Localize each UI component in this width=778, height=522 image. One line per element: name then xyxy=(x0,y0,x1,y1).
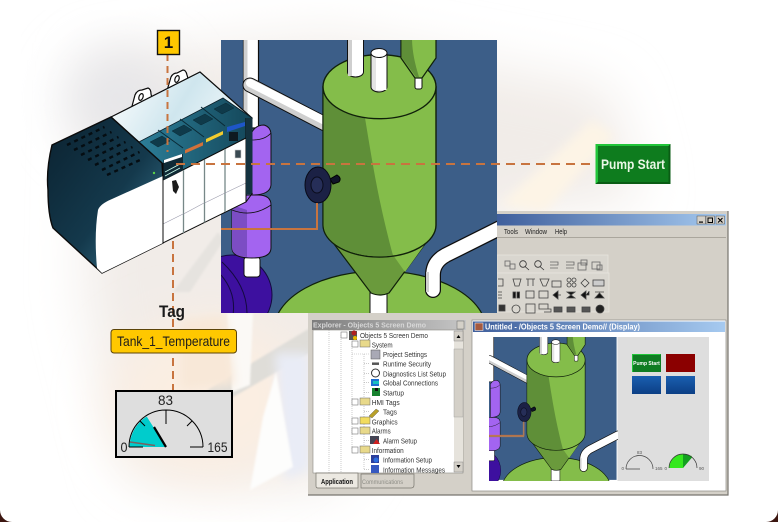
gauge low marker xyxy=(130,442,155,446)
display title bar xyxy=(473,322,725,332)
explorer title bar: Explorer - Objects 5 Screen Demo xyxy=(313,321,426,330)
tree labels: Runtime Security xyxy=(383,360,431,369)
controller notches xyxy=(137,103,234,156)
key switch xyxy=(172,180,179,194)
tag label xyxy=(111,330,236,353)
mini button: pump start: Pump Start xyxy=(633,361,660,367)
button: pump start: Pump Start xyxy=(601,156,665,172)
mini tank scene xyxy=(489,337,618,481)
panel: explorer xyxy=(312,320,466,488)
mini gauge: right: 0 xyxy=(664,466,667,471)
badge: number 1 xyxy=(158,30,180,54)
explorer scrollbar xyxy=(454,331,463,472)
tree labels xyxy=(360,331,446,474)
mini gauge: left xyxy=(621,450,663,471)
tree labels: System xyxy=(372,340,393,349)
mini gauge: left: 0 xyxy=(621,466,624,471)
panel: display window xyxy=(472,320,726,491)
software window xyxy=(308,211,728,495)
connector: dashed line up xyxy=(166,54,168,152)
tree labels: Global Connections xyxy=(383,379,438,388)
menu bar: Tools xyxy=(504,227,518,236)
controller mounting tabs xyxy=(131,70,190,110)
connector: dashed line down xyxy=(172,241,174,391)
tree labels: Information Setup xyxy=(383,456,432,465)
tree labels: Graphics xyxy=(372,417,398,426)
controller front white xyxy=(96,176,163,273)
gauge fill xyxy=(130,416,166,447)
base dome xyxy=(274,271,486,389)
gauge xyxy=(116,391,232,457)
explorer tabs xyxy=(316,473,414,488)
mini gauge: left: 165 xyxy=(655,466,663,471)
mini button: red xyxy=(666,354,695,372)
connector: dashed line across xyxy=(176,163,593,165)
pipe: vertical left xyxy=(244,38,258,128)
tree labels: Startup xyxy=(383,388,404,397)
window controls xyxy=(697,216,724,224)
top pipe centre xyxy=(371,48,387,92)
tree labels: HMI Tags xyxy=(372,398,400,407)
mini button: pump start xyxy=(632,354,661,372)
badge: number 1: 1 xyxy=(164,33,173,52)
tree labels: Tags xyxy=(383,408,397,417)
gauge arc and ticks xyxy=(129,410,203,447)
tree labels: Objects 5 Screen Demo xyxy=(360,331,428,340)
display title bar: Untitled - /Objects 5 Screen Demo// (Display) xyxy=(485,322,640,332)
module screen xyxy=(229,132,238,141)
explorer tabs: Application xyxy=(321,479,353,486)
tank body xyxy=(323,87,436,257)
mini gauge: left: 83 xyxy=(637,450,642,455)
sensor xyxy=(305,167,340,203)
tree lines xyxy=(329,330,370,473)
gauge needle xyxy=(154,427,166,447)
corner: bottom right xyxy=(766,510,778,522)
gauge values: 0 xyxy=(120,439,128,455)
module display xyxy=(164,154,183,180)
mini gauge: right xyxy=(664,454,705,471)
gauge values xyxy=(120,392,228,455)
tank top xyxy=(323,55,436,119)
pipe: bottom stub xyxy=(370,285,387,315)
window title bar xyxy=(497,214,726,226)
controller vent holes xyxy=(67,127,140,175)
cone xyxy=(331,240,428,295)
tree labels: Information Messages xyxy=(383,465,445,474)
tree labels: Project Settings xyxy=(383,350,427,359)
cylinder: purple upper xyxy=(252,125,271,195)
tree labels: Alarm Setup xyxy=(383,436,417,445)
explorer tabs: Communications xyxy=(362,479,404,486)
controller top panel xyxy=(111,72,252,163)
controller xyxy=(48,70,252,273)
elbow pipe xyxy=(428,228,500,292)
tag label: Tank_1_Temperature xyxy=(117,333,230,349)
funnel xyxy=(401,38,436,89)
tree icons xyxy=(341,330,380,473)
tree labels: Information xyxy=(372,446,404,455)
scene background xyxy=(221,40,497,313)
yellow strip xyxy=(206,131,223,142)
pipe: diagonal xyxy=(250,83,325,124)
button: pump start xyxy=(596,144,670,184)
wire xyxy=(197,203,317,229)
mini button: blue left xyxy=(632,376,661,394)
controller left housing xyxy=(48,117,163,273)
controller teal top xyxy=(137,98,252,184)
mini gray panel xyxy=(618,337,709,481)
toolbar top xyxy=(497,255,608,273)
menu bar: Help xyxy=(555,227,567,236)
mini button: blue right xyxy=(666,376,695,394)
controller modules xyxy=(163,118,252,243)
mini gauge: right: 90 xyxy=(699,466,705,471)
tree labels: Diagnostics List Setup xyxy=(383,369,446,378)
tree labels: Alarms xyxy=(372,427,391,436)
orange strip xyxy=(185,142,203,154)
corner: bottom left xyxy=(0,510,12,522)
top pipe left xyxy=(348,38,364,77)
motor: purple xyxy=(192,255,272,335)
menu bar: Window xyxy=(525,227,548,236)
panel: tank scene xyxy=(221,40,497,313)
status light xyxy=(153,172,155,174)
module badge xyxy=(235,150,241,158)
gauge values: 83 xyxy=(158,392,173,408)
gauge values: 165 xyxy=(208,439,228,455)
cylinder: purple lower xyxy=(232,195,271,258)
menu bar xyxy=(504,227,567,236)
toolbar icons xyxy=(497,273,609,313)
heading: tag: Tag xyxy=(159,302,185,321)
blue strip xyxy=(227,122,245,132)
